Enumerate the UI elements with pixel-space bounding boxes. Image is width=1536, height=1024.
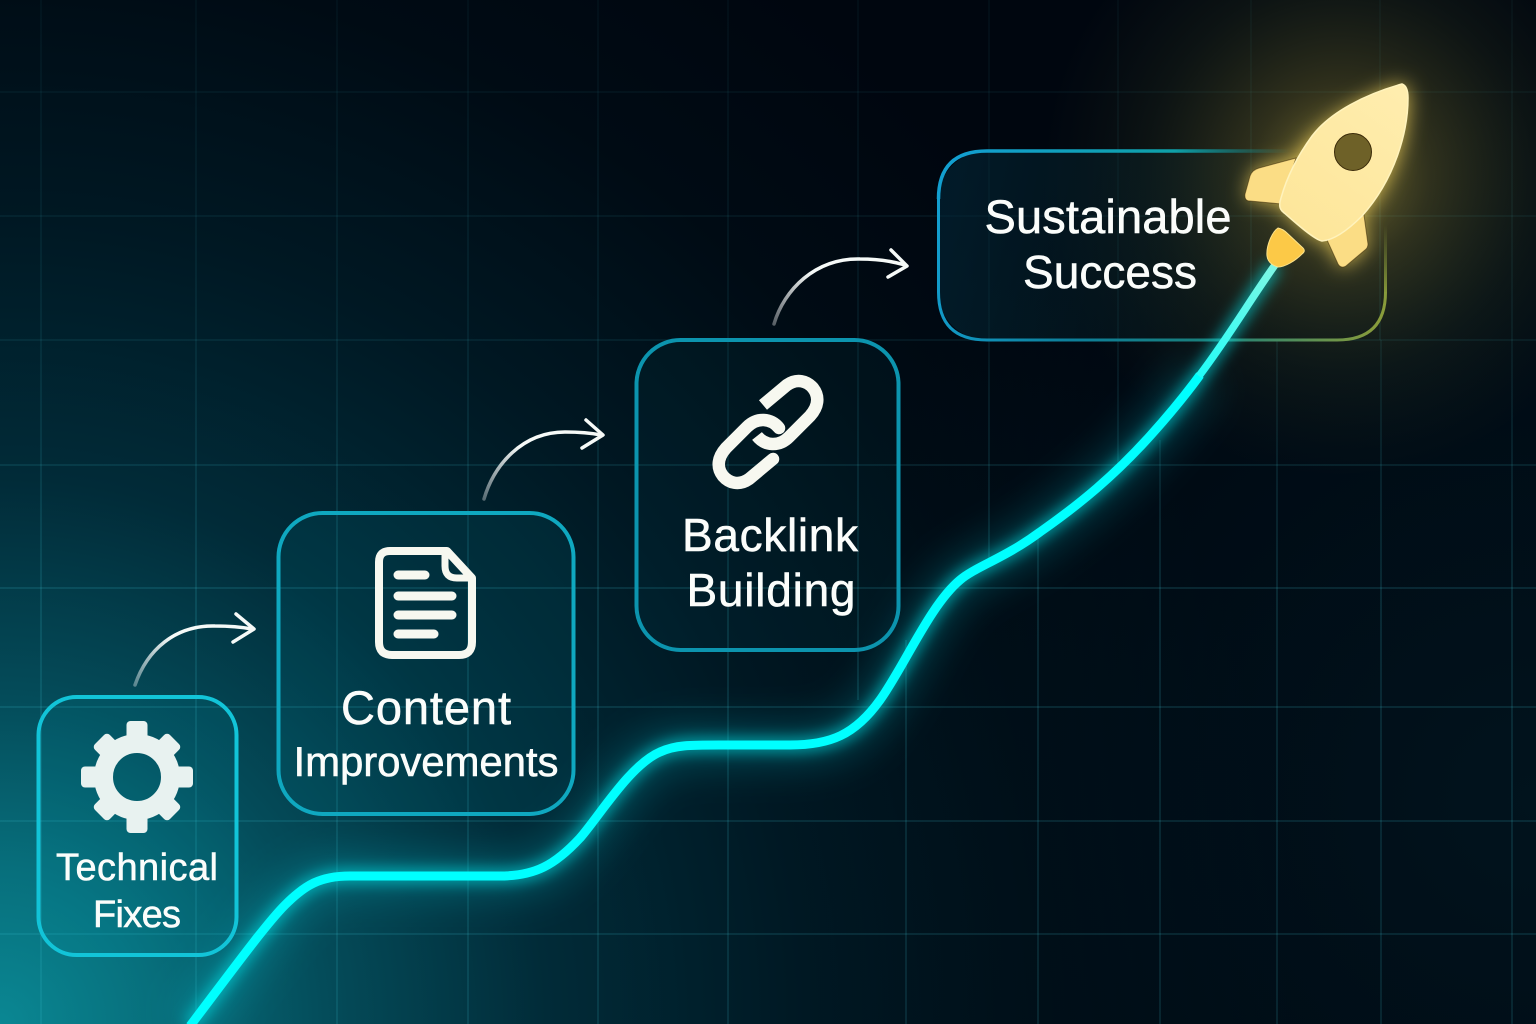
label: technical fixes: Fixes [93, 894, 181, 936]
flame [1267, 228, 1304, 267]
icon: chain link [719, 381, 817, 483]
lower fin [1327, 208, 1368, 267]
label: sustainable success: Success [1023, 246, 1197, 298]
panel: content improvements [278, 513, 574, 814]
label: technical fixes: Technical [56, 847, 218, 889]
panel: technical fixes [38, 697, 236, 955]
label: backlink building [682, 509, 859, 616]
left fin [1245, 158, 1296, 204]
label: backlink building: Backlink [682, 509, 859, 561]
arrow: step two to three [484, 420, 603, 499]
arrow: step three to four [774, 250, 907, 324]
label: content improvements [294, 681, 558, 785]
panel: backlink building [636, 340, 898, 650]
panel: sustainable success [938, 151, 1386, 340]
curve ambient glow [190, 375, 1200, 1024]
icon: document [379, 551, 472, 655]
label: sustainable success [984, 190, 1232, 298]
label: content improvements: Improvements [294, 738, 558, 785]
label: sustainable success: Sustainable [984, 190, 1232, 243]
icon: rocket [1245, 84, 1408, 268]
label: content improvements: Content [341, 681, 511, 734]
window [1334, 134, 1372, 170]
growth curve [190, 265, 1275, 1024]
icon: gear [81, 721, 193, 833]
label: technical fixes [56, 847, 218, 936]
arrow: step one to two [135, 614, 254, 685]
label: backlink building: Building [686, 564, 856, 616]
body [1280, 84, 1408, 241]
rocket ambient glow [1000, 0, 1536, 500]
